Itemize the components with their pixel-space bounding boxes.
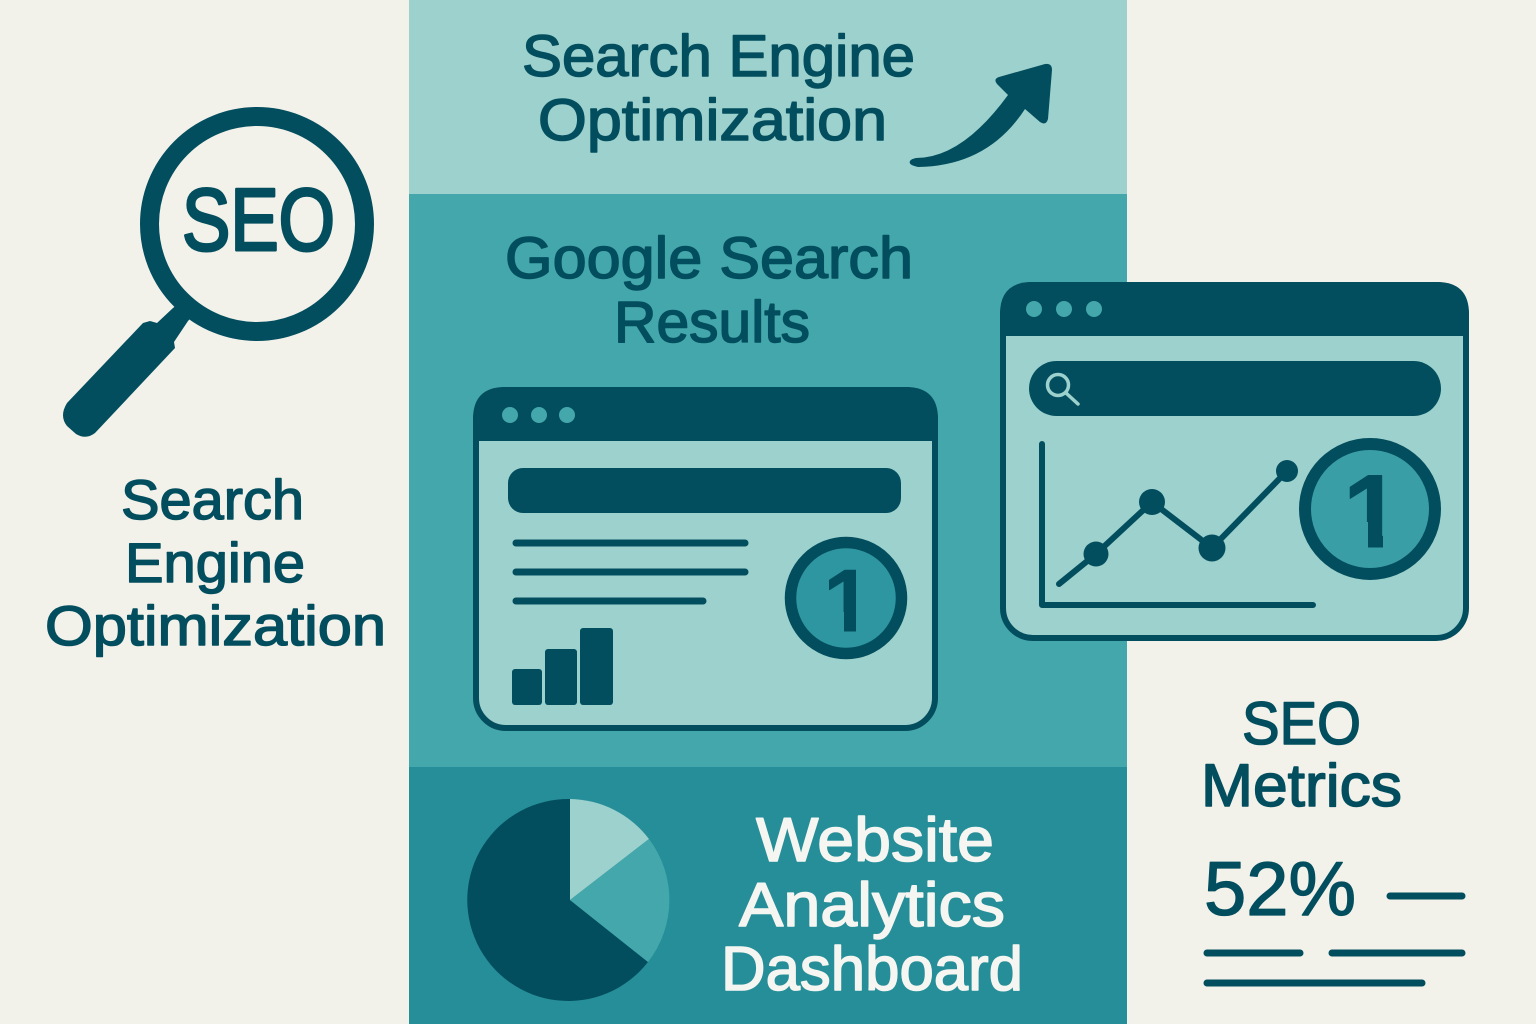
heading: Search Engine Optimization: Search [121,468,304,531]
search result title bar [508,468,901,513]
icon: magnifying glass with SEO [63,116,364,437]
browser window: search results [473,387,938,728]
pie chart [467,799,669,1001]
heading: Website Analytics Dashboard: Dashboard [721,935,1023,1004]
icon: small magnifier [1048,374,1078,404]
heading: Google Search Results [505,226,913,355]
heading: Website Analytics Dashboard [721,806,1023,1004]
text lines [516,543,745,601]
heading: Website Analytics Dashboard: Analytics [739,871,1005,940]
rank badge 1 [1305,444,1435,574]
metric value: 52% [1204,847,1356,932]
heading: Google Search Results: Results [614,290,810,355]
icon: magnifying glass with SEO: SEO [182,170,335,269]
metric text lines [1207,896,1462,983]
browser window: rank tracking [1000,282,1469,638]
bar chart [512,628,613,705]
heading: SEO Metrics [1201,690,1402,819]
rank badge 1: 1 [1343,454,1401,570]
heading: Search Engine Optimization [522,24,915,153]
line chart [1042,444,1313,605]
heading: Search Engine Optimization: Optimization [45,594,386,657]
icon: upward arrow [910,64,1052,167]
panel: left SEO column [45,116,386,657]
window control dots [502,407,575,423]
rank badge 1 [790,542,902,654]
heading: Website Analytics Dashboard: Website [756,806,994,875]
search bar [1029,361,1441,416]
heading: Google Search Results: Google Search [505,226,913,291]
rank badge 1: 1 [824,551,872,650]
heading: SEO Metrics: SEO [1242,690,1361,757]
heading: SEO Metrics: Metrics [1201,752,1402,819]
heading: Search Engine Optimization: Search Engine [522,24,915,89]
panel: SEO metrics [1201,690,1462,983]
panel: bottom band Website Analytics Dashboard [409,767,1127,1024]
heading: Search Engine Optimization [45,468,386,657]
panel: middle band Google Search Results [409,194,1127,767]
window control dots [1026,301,1102,317]
heading: Search Engine Optimization: Engine [125,531,305,594]
heading: Search Engine Optimization: Optimization [538,88,887,153]
panel: top band Search Engine Optimization [409,0,1127,194]
